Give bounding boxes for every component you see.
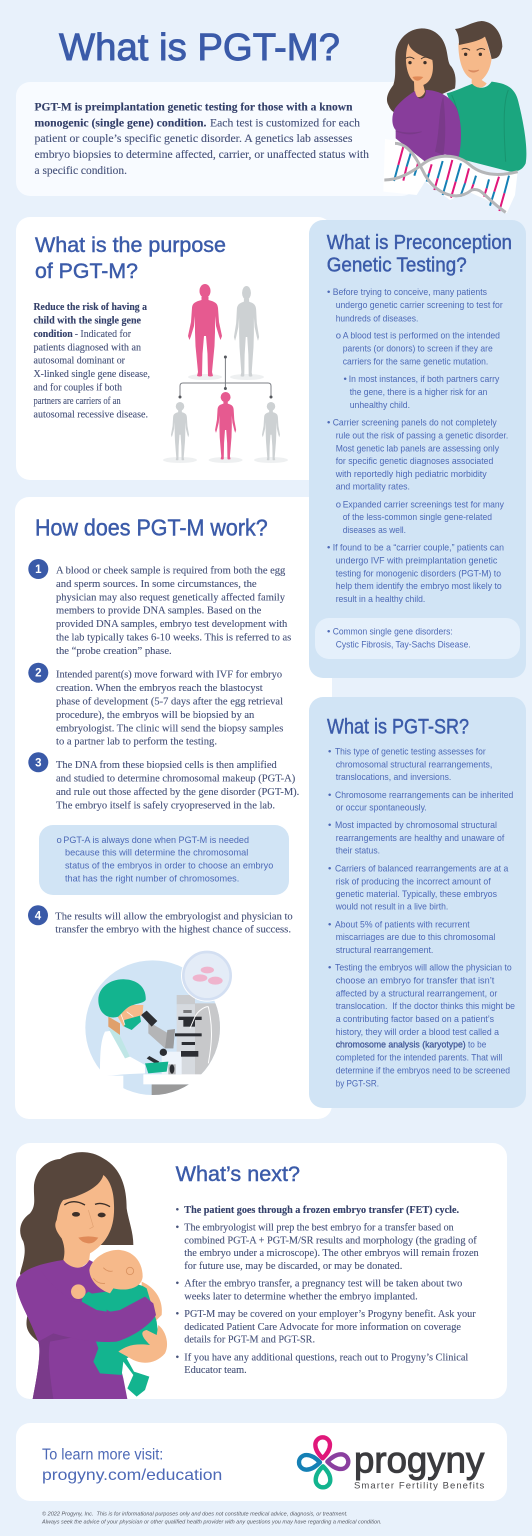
preconception heading bbox=[327, 231, 512, 277]
PGT-SR bullet list: structural rearrangement. bbox=[336, 945, 433, 956]
intro text: Each test is customized for each bbox=[210, 117, 360, 129]
PGT-SR bullet list: a contributing factor based on a patient’s bbox=[336, 1014, 494, 1025]
illustration: embryologist at microscope bbox=[83, 950, 233, 1096]
preconception bullet list: Expanded carrier screenings test for many bbox=[343, 499, 504, 510]
next bullet list: PGT-M may be covered on your employer’s Progyny benefit. Ask your bbox=[184, 1309, 476, 1320]
preconception bullet list: Most genetic lab panels are assessing only bbox=[336, 443, 499, 454]
preconception bullet list: o bbox=[336, 331, 341, 342]
preconception bullet list: diseases as well. bbox=[343, 525, 406, 536]
preconception bullet list: • bbox=[344, 374, 347, 385]
PGT-SR bullet list: genetic material. Typically, these embryos bbox=[336, 889, 497, 900]
PGT-SR bullet list: choose an embryo for transfer that isn’t bbox=[336, 975, 495, 986]
next bullet list: • bbox=[176, 1352, 180, 1363]
learn more link text bbox=[42, 1446, 222, 1484]
panel: what is preconception genetic testing bbox=[309, 220, 526, 678]
step 2: Intended parent(s) move forward with IVF for embryo bbox=[56, 670, 282, 681]
PGT-SR bullet list: completed for the intended parents. That will bbox=[336, 1053, 502, 1064]
callout: common single gene disorders: • bbox=[327, 626, 330, 637]
PGT-SR bullet list: or occur spontaneously. bbox=[336, 803, 427, 814]
PGT-SR bullet list: • bbox=[328, 963, 331, 974]
next bullet list: combined PGT-A + PGT-M/SR results and morphology (the grading of bbox=[184, 1235, 477, 1246]
PGT-SR bullet list: chromosome analysis (karyotype) bbox=[336, 1040, 466, 1051]
preconception bullet list: A blood test is performed on the intended bbox=[343, 331, 500, 342]
step 2: 2 bbox=[35, 668, 42, 680]
preconception bullet list: In most instances, if both partners carry bbox=[349, 374, 500, 385]
next bullet list: weeks later to determine whether the embryo implanted. bbox=[184, 1292, 418, 1303]
panel: introduction bbox=[16, 82, 416, 196]
step 3: and rule out those affected by the gene disorder (PGT-M). bbox=[56, 787, 299, 798]
PGT-SR bullet list: Most impacted by chromosomal structural bbox=[335, 820, 497, 831]
illustration: mother holding baby bbox=[16, 1152, 167, 1399]
PGT-SR bullet list: Testing the embryos will allow the physician to bbox=[335, 963, 512, 974]
step 1 bbox=[28, 559, 291, 657]
preconception heading: Genetic Testing? bbox=[327, 254, 467, 277]
intro text: PGT-M is preimplantation genetic testing for those with a known bbox=[34, 102, 353, 114]
preconception bullet list: hundreds of diseases. bbox=[336, 313, 418, 324]
how heading: How does PGT-M work? bbox=[35, 515, 268, 541]
preconception bullet list: Before trying to conceive, many patients bbox=[333, 287, 487, 298]
preconception heading: What is Preconception bbox=[327, 231, 512, 254]
PGT-SR bullet list: their status. bbox=[336, 846, 380, 857]
preconception bullet list: for specific genetic diagnoses associated bbox=[336, 456, 493, 467]
step 1: the “probe creation” phase. bbox=[56, 646, 172, 657]
next bullet list: After the embryo transfer, a pregnancy test will be taken about two bbox=[184, 1279, 462, 1290]
step 2 bbox=[28, 663, 283, 748]
next bullet list: dedicated Patient Care Advocate for more information on coverage bbox=[184, 1322, 461, 1333]
intro background bbox=[16, 82, 416, 196]
purpose text: X-linked single gene disease, bbox=[34, 369, 150, 380]
PGT-SR bullet list: history, they will order a blood test called a bbox=[336, 1027, 500, 1038]
preconception bullet list: parents (or donors) to screen if they are bbox=[343, 344, 493, 355]
disclaimer text: © 2022 Progyny, Inc. This is for informational purposes only and does not constitute medical advice, diagnosis, or treatment. bbox=[42, 1510, 348, 1517]
PGT-SR bullet list: This type of genetic testing assesses for bbox=[335, 747, 486, 758]
step 1: A blood or cheek sample is required from both the egg bbox=[56, 566, 286, 577]
step 4 bbox=[28, 905, 293, 936]
step 4: transfer the embryo with the highest chance of success. bbox=[55, 925, 291, 936]
preconception bullet list: Carrier screening panels do not completely bbox=[333, 417, 497, 428]
purpose text: partners are carriers of an bbox=[34, 396, 121, 407]
panel: how does PGT-M work bbox=[15, 497, 332, 1119]
preconception bullet list: the gene, there is a higher risk for an bbox=[350, 387, 487, 398]
learn more link text: To learn more visit: bbox=[42, 1446, 163, 1463]
next bullet list: the embryo under a microscope). The other embryos will remain frozen bbox=[184, 1248, 479, 1259]
PGT-SR bullet list: translocations, and inversions. bbox=[336, 772, 451, 783]
PGT-SR bullet list: affected by a structural rearrangement, or bbox=[336, 988, 497, 999]
purpose text: - Indicated for bbox=[75, 329, 132, 340]
callout: common single gene disorders: Cystic Fibrosis, Tay-Sachs Disease. bbox=[336, 639, 471, 650]
step 3: and studied to determine chromosomal makeup (PGT-A) bbox=[56, 774, 296, 785]
learn more link text: progyny.com/education bbox=[42, 1467, 222, 1484]
panel: what is PGT-SR bbox=[309, 697, 526, 1108]
next bullet list: • bbox=[176, 1279, 180, 1290]
PGT-SR bullet list: • bbox=[328, 790, 331, 801]
callout: PGT-A note: because this will determine the chromosomal bbox=[65, 848, 248, 859]
purpose text: autosomal recessive disease. bbox=[34, 410, 148, 420]
preconception bullet list: unhealthy child. bbox=[350, 400, 410, 411]
purpose heading bbox=[35, 233, 226, 283]
intro text bbox=[34, 102, 369, 177]
PGT-SR bullet list: • bbox=[328, 747, 331, 758]
next bullet list: If you have any additional questions, reach out to Progyny’s Clinical bbox=[184, 1352, 468, 1363]
preconception bullet list bbox=[327, 287, 508, 605]
next bullet list: The embryologist will prep the best embryo for a transfer based on bbox=[184, 1223, 454, 1234]
preconception background bbox=[309, 220, 526, 678]
PGT-SR bullet list: • bbox=[328, 820, 331, 831]
PGT-SR bullet list: risk of producing the incorrect amount of bbox=[336, 876, 491, 887]
logo: Progyny bbox=[299, 1437, 485, 1492]
step 3: The DNA from these biopsied cells is then amplified bbox=[56, 760, 277, 771]
next bullet list: The patient goes through a frozen embryo transfer (FET) cycle. bbox=[184, 1205, 459, 1216]
preconception bullet list: carriers for the same genetic mutation. bbox=[343, 357, 488, 368]
step 1: physician may also request genetically affected family bbox=[56, 592, 286, 603]
next bullet list: • bbox=[176, 1223, 180, 1234]
callout: common single gene disorders bbox=[315, 618, 520, 659]
preconception bullet list: • bbox=[327, 287, 330, 298]
preconception bullet list: of the less-common single gene-related bbox=[343, 512, 492, 523]
purpose background bbox=[16, 217, 332, 480]
logo: Progyny: progyny bbox=[354, 1440, 485, 1481]
next bullet list: for future use, may be discarded, or may be donated. bbox=[184, 1261, 402, 1272]
next background bbox=[16, 1143, 507, 1399]
preconception bullet list: undergo genetic carrier screening to test for bbox=[336, 300, 503, 311]
preconception bullet list: o bbox=[336, 499, 341, 510]
PGT-SR bullet list: rearrangements are healthy and unaware of bbox=[336, 833, 505, 844]
disclaimer text bbox=[41, 1510, 382, 1525]
step 4: The results will allow the embryologist and physician to bbox=[55, 911, 293, 922]
purpose text: and for couples if both bbox=[34, 383, 122, 394]
preconception bullet list: • bbox=[327, 417, 330, 428]
callout: PGT-A note: PGT-A is always done when PGT-M is needed bbox=[63, 835, 249, 846]
PGT-SR background bbox=[309, 697, 526, 1108]
logo: Progyny: Smarter Fertility Benefits bbox=[354, 1481, 485, 1492]
purpose text: child with the single gene bbox=[34, 315, 142, 326]
preconception bullet list: • bbox=[327, 542, 330, 553]
callout: PGT-A note: status of the embryos in order to choose an embryo bbox=[65, 861, 273, 872]
purpose text: autosomal dominant or bbox=[34, 356, 126, 367]
purpose heading: What is the purpose bbox=[35, 233, 226, 257]
PGT-SR bullet list: About 5% of patients with recurrent bbox=[335, 919, 470, 930]
preconception bullet list: result in a healthy child. bbox=[336, 594, 425, 605]
PGT-SR bullet list: to be bbox=[468, 1040, 486, 1051]
PGT-SR bullet list: Chromosome rearrangements can be inherited bbox=[335, 790, 513, 801]
step 3 bbox=[28, 752, 299, 811]
preconception bullet list: and mortality rates. bbox=[336, 482, 410, 493]
step 1: the lab typically takes 6-10 weeks. This is referred to as bbox=[56, 633, 291, 644]
step 2: phase of development (5-7 days after the egg retrieval bbox=[56, 696, 283, 707]
PGT-SR bullet list: by PGT-SR. bbox=[336, 1079, 379, 1090]
preconception bullet list: undergo IVF with preimplantation genetic bbox=[336, 555, 498, 566]
PGT-SR bullet list: would not result in a live birth. bbox=[335, 902, 448, 913]
preconception bullet list: rule out the risk of passing a genetic disorder. bbox=[336, 430, 508, 441]
footer background bbox=[16, 1423, 507, 1501]
step 1: members to provide DNA samples. Based on the bbox=[56, 606, 262, 617]
panel: what is the purpose of PGT-M bbox=[16, 217, 332, 480]
callout: PGT-A note bbox=[39, 825, 289, 895]
intro text: embryo biopsies to determine affected, carrier, or unaffected status with bbox=[34, 149, 369, 161]
step 2: procedure), the embryos will be biopsied by an bbox=[56, 710, 255, 721]
PGT-SR bullet list: determine if the embryos need to be screened bbox=[336, 1066, 510, 1077]
disclaimer text: Always seek the advice of your physician or other qualified health provider with any questions you may have regarding a medical condition. bbox=[41, 1519, 382, 1525]
preconception bullet list: help them identify the embryo most likely to bbox=[336, 581, 502, 592]
preconception bullet list: If found to be a “carrier couple,” patients can bbox=[333, 542, 504, 553]
step 2: embryologist. The clinic will send the biopsy samples bbox=[56, 723, 283, 734]
next bullet list: • bbox=[176, 1309, 180, 1320]
step 2: to a partner lab to perform the testing. bbox=[56, 737, 217, 748]
panel: what's next bbox=[16, 1143, 507, 1399]
PGT-SR heading: What is PGT-SR? bbox=[327, 714, 469, 738]
callout: common single gene disorders: Common single gene disorders: bbox=[333, 626, 453, 637]
next heading: What’s next? bbox=[176, 1162, 300, 1186]
step 4: 4 bbox=[35, 910, 42, 922]
step 1: 1 bbox=[35, 564, 42, 576]
step 3: The embryo itself is safely cryopreserved in the lab. bbox=[56, 800, 275, 811]
next bullet list bbox=[176, 1205, 479, 1376]
next bullet list: details for PGT-M and PGT-SR. bbox=[184, 1335, 315, 1346]
PGT-SR bullet list: miscarriages are due to this chromosomal bbox=[336, 932, 495, 943]
callout: PGT-A note: that has the right number of chromosomes. bbox=[65, 874, 239, 885]
purpose heading: of PGT-M? bbox=[35, 259, 138, 283]
icon: family inheritance diagram bbox=[163, 284, 288, 463]
purpose text: Reduce the risk of having a bbox=[34, 302, 147, 313]
PGT-SR bullet list: chromosomal structural rearrangements, bbox=[336, 759, 492, 770]
purpose text: patients diagnosed with an bbox=[34, 342, 141, 353]
preconception bullet list: with reportedly high pediatric morbidity bbox=[335, 469, 487, 480]
step 1: and sperm sources. In some circumstances, the bbox=[56, 579, 257, 590]
PGT-SR bullet list: translocation. If the doctor thinks this might be bbox=[336, 1001, 515, 1012]
intro text: a specific condition. bbox=[34, 165, 127, 177]
purpose text: condition bbox=[34, 329, 73, 340]
purpose text bbox=[34, 302, 150, 420]
PGT-SR bullet list: Carriers of balanced rearrangements are at a bbox=[335, 863, 509, 874]
intro text: monogenic (single gene) condition. bbox=[34, 117, 207, 129]
PGT-SR bullet list bbox=[328, 747, 515, 1090]
intro text: patient or couple’s specific genetic disorder. A genetics lab assesses bbox=[34, 133, 353, 145]
illustration: couple with DNA helix bbox=[383, 21, 526, 213]
PGT-SR bullet list: • bbox=[328, 919, 331, 930]
title: What is PGT-M? bbox=[59, 27, 340, 69]
step 2: creation. When the embryos reach the blastocyst bbox=[56, 683, 263, 694]
preconception bullet list: testing for monogenic disorders (PGT-M) to bbox=[336, 568, 501, 579]
panel: learn more and logo bbox=[16, 1423, 507, 1501]
PGT-SR bullet list: • bbox=[328, 863, 331, 874]
how background bbox=[15, 497, 332, 1119]
next bullet list: • bbox=[176, 1205, 180, 1216]
next bullet list: Educator team. bbox=[184, 1365, 247, 1376]
callout: PGT-A note: o bbox=[56, 835, 62, 846]
step 1: provided DNA samples, embryo test development with bbox=[56, 619, 288, 630]
step 3: 3 bbox=[35, 757, 42, 769]
